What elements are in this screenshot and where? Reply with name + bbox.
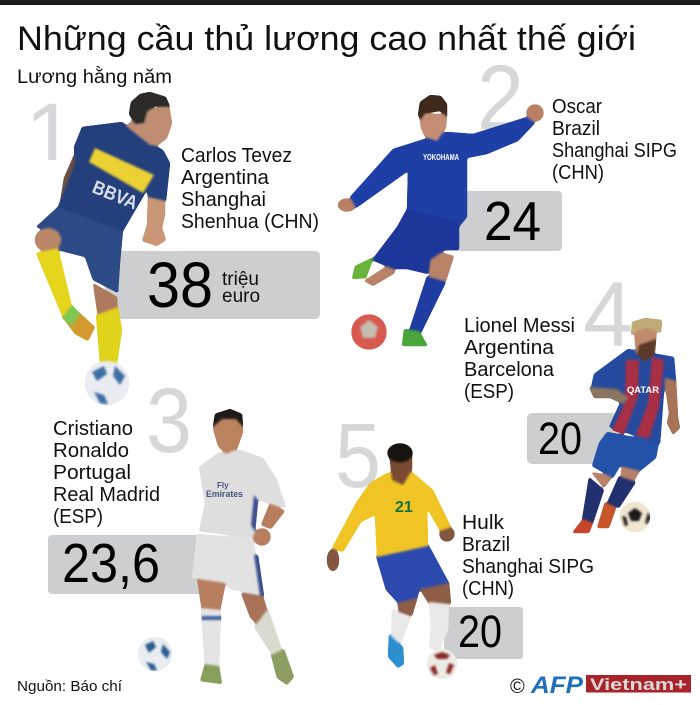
player figure: Hulk: 21 bbox=[395, 499, 413, 516]
rank number 1: 1 bbox=[25, 85, 76, 187]
salary box 38 million euro: 38 bbox=[147, 249, 213, 321]
player details: Barcelona bbox=[464, 359, 555, 381]
player details: (CHN) bbox=[462, 578, 514, 600]
player details: (ESP) bbox=[464, 381, 514, 403]
rank number 5: 5 bbox=[335, 405, 381, 507]
player details: Brazil bbox=[552, 118, 600, 140]
player details: Shanghai SIPG bbox=[552, 140, 677, 162]
player details: Shanghai bbox=[181, 189, 266, 211]
panel: rank 4 Lionel Messi bbox=[464, 264, 680, 533]
player figure: Ronaldo: Fly bbox=[217, 481, 229, 490]
salary box 20 bbox=[527, 413, 617, 464]
credit logos bbox=[510, 672, 691, 699]
salary box 23,6 bbox=[48, 532, 208, 594]
player details: Ronaldo bbox=[53, 440, 129, 462]
player details: (CHN) bbox=[552, 162, 604, 184]
player details: Portugal bbox=[53, 462, 131, 484]
player figure: Tevez: BBVA bbox=[89, 177, 141, 214]
copyright symbol: © bbox=[510, 676, 525, 698]
salary box 20 bbox=[444, 606, 523, 659]
rank number 4: 4 bbox=[583, 264, 633, 366]
player figure: Oscar bbox=[338, 95, 544, 350]
salary box 23,6: 23,6 bbox=[62, 532, 160, 594]
panel: rank 3 Cristiano Ronaldo bbox=[48, 370, 294, 685]
player details: Argentina bbox=[464, 337, 555, 359]
player figure: Ronaldo: Emirates bbox=[206, 489, 243, 500]
player details bbox=[181, 145, 319, 233]
panel: rank 2 Oscar bbox=[338, 47, 677, 350]
player details bbox=[53, 418, 160, 528]
AFP logo: AFP bbox=[530, 672, 584, 699]
player details: Lionel Messi bbox=[464, 315, 575, 337]
salary box 24 bbox=[440, 190, 562, 252]
salary box 38 million euro: triệu bbox=[222, 269, 259, 290]
player details: (ESP) bbox=[53, 506, 103, 528]
player details bbox=[462, 512, 594, 600]
player details bbox=[464, 315, 575, 403]
salary box 38 million euro bbox=[105, 249, 320, 321]
Vietnam+ logo: Vietnam+ bbox=[590, 675, 687, 694]
player details: Real Madrid bbox=[53, 484, 160, 506]
salary box 24: 24 bbox=[484, 190, 541, 252]
player details: Oscar bbox=[552, 96, 602, 118]
player details: Brazil bbox=[462, 534, 510, 556]
player details bbox=[552, 96, 677, 184]
subtitle: Lương hằng năm bbox=[17, 66, 172, 88]
panel: rank 1 Carlos Tevez bbox=[25, 85, 320, 405]
player figure: Ronaldo bbox=[138, 409, 294, 685]
player figure: Messi bbox=[572, 318, 680, 533]
source note: Nguồn: Báo chí bbox=[17, 679, 122, 695]
player details: Shanghai SIPG bbox=[462, 556, 594, 578]
title: Những cầu thủ lương cao nhất thế giới bbox=[17, 20, 636, 58]
salary box 20: 20 bbox=[538, 413, 582, 464]
panel: rank 5 Hulk bbox=[327, 405, 594, 679]
player details: Carlos Tevez bbox=[181, 145, 292, 167]
rank number 2: 2 bbox=[477, 47, 524, 149]
rank number 3: 3 bbox=[146, 370, 192, 472]
player figure: Tevez bbox=[35, 92, 172, 405]
player details: Hulk bbox=[462, 512, 505, 534]
player details: Cristiano bbox=[53, 418, 133, 440]
player figure: Hulk bbox=[327, 444, 457, 679]
player figure: Messi: QATAR bbox=[627, 385, 660, 395]
player details: Shenhua (CHN) bbox=[181, 211, 319, 233]
player details: Argentina bbox=[181, 167, 270, 189]
salary box 38 million euro: euro bbox=[222, 286, 260, 307]
salary box 20: 20 bbox=[458, 606, 502, 657]
player figure: Oscar: YOKOHAMA bbox=[423, 153, 459, 162]
